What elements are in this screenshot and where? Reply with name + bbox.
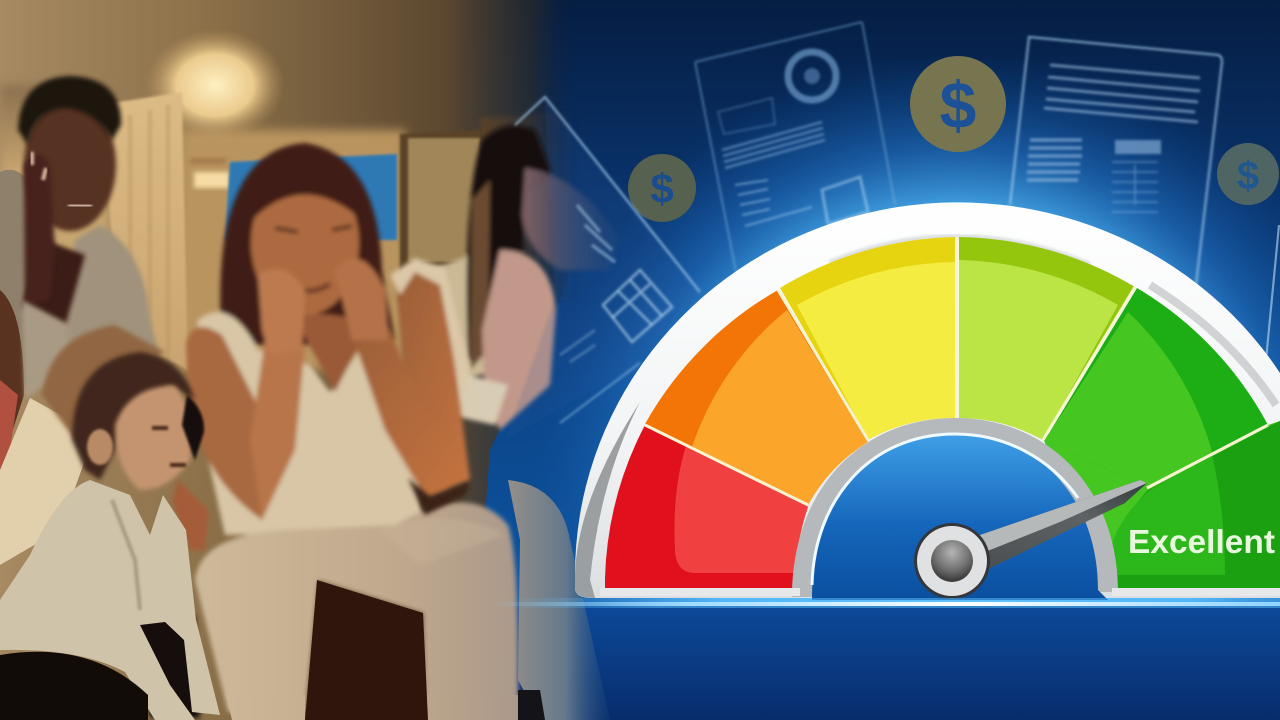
room wall <box>0 0 620 720</box>
coin: large: $ <box>940 68 976 142</box>
face <box>251 171 359 315</box>
woman at right, under document <box>430 126 620 430</box>
label: Excellent: Excellent <box>1128 523 1275 560</box>
gauge <box>575 202 1280 600</box>
curtain <box>100 92 188 370</box>
arm left <box>186 327 262 520</box>
elbow shadow <box>408 478 470 515</box>
coin: right <box>1217 143 1279 205</box>
child <box>0 352 220 720</box>
second pair of legs <box>508 480 610 720</box>
left kid partial <box>0 290 165 565</box>
hands <box>258 269 305 355</box>
red segment <box>605 425 808 588</box>
red hand <box>172 480 208 550</box>
gauge outer ring <box>575 202 1280 598</box>
forearm right <box>352 320 468 497</box>
wall lamp <box>190 158 230 188</box>
upper arm right <box>396 271 470 495</box>
orange segment <box>645 290 868 505</box>
green segment lower <box>1110 421 1280 588</box>
hair <box>220 143 395 345</box>
window to TV <box>225 154 397 240</box>
hub blue centre <box>812 434 1108 600</box>
body top <box>195 312 425 535</box>
icon: document badge <box>788 52 836 100</box>
face <box>115 386 191 490</box>
needle pivot <box>914 523 990 599</box>
dark gap <box>135 615 200 718</box>
yellow segment <box>780 237 955 440</box>
coin: large <box>910 56 1006 152</box>
couch base <box>305 580 428 720</box>
left tilted glass document <box>505 97 700 440</box>
ring grey rim <box>575 402 640 598</box>
pants lower edge <box>226 695 518 720</box>
shirt <box>0 480 220 720</box>
dark foreground <box>0 652 148 720</box>
floating document: centre-left <box>695 22 895 272</box>
lime segment <box>959 237 1135 440</box>
green backing <box>1040 421 1280 588</box>
green segment upper <box>1045 288 1268 488</box>
floating document: right <box>1010 37 1222 285</box>
man left <box>0 76 158 420</box>
bottom rim <box>600 588 1280 596</box>
coin: left: $ <box>650 165 674 212</box>
floating document: far right edge <box>1266 225 1279 360</box>
segment dividers <box>645 237 1268 505</box>
hair <box>72 352 195 480</box>
horizon glow line <box>490 598 1280 608</box>
ceiling lamp glow <box>145 29 285 141</box>
coin: left <box>628 154 696 222</box>
neck <box>290 310 372 392</box>
woman centre <box>186 143 518 712</box>
hub arc <box>792 418 1118 597</box>
photo: family watching <box>0 0 620 720</box>
pants <box>195 502 518 712</box>
needle <box>980 480 1147 568</box>
coin: right: $ <box>1237 154 1259 198</box>
